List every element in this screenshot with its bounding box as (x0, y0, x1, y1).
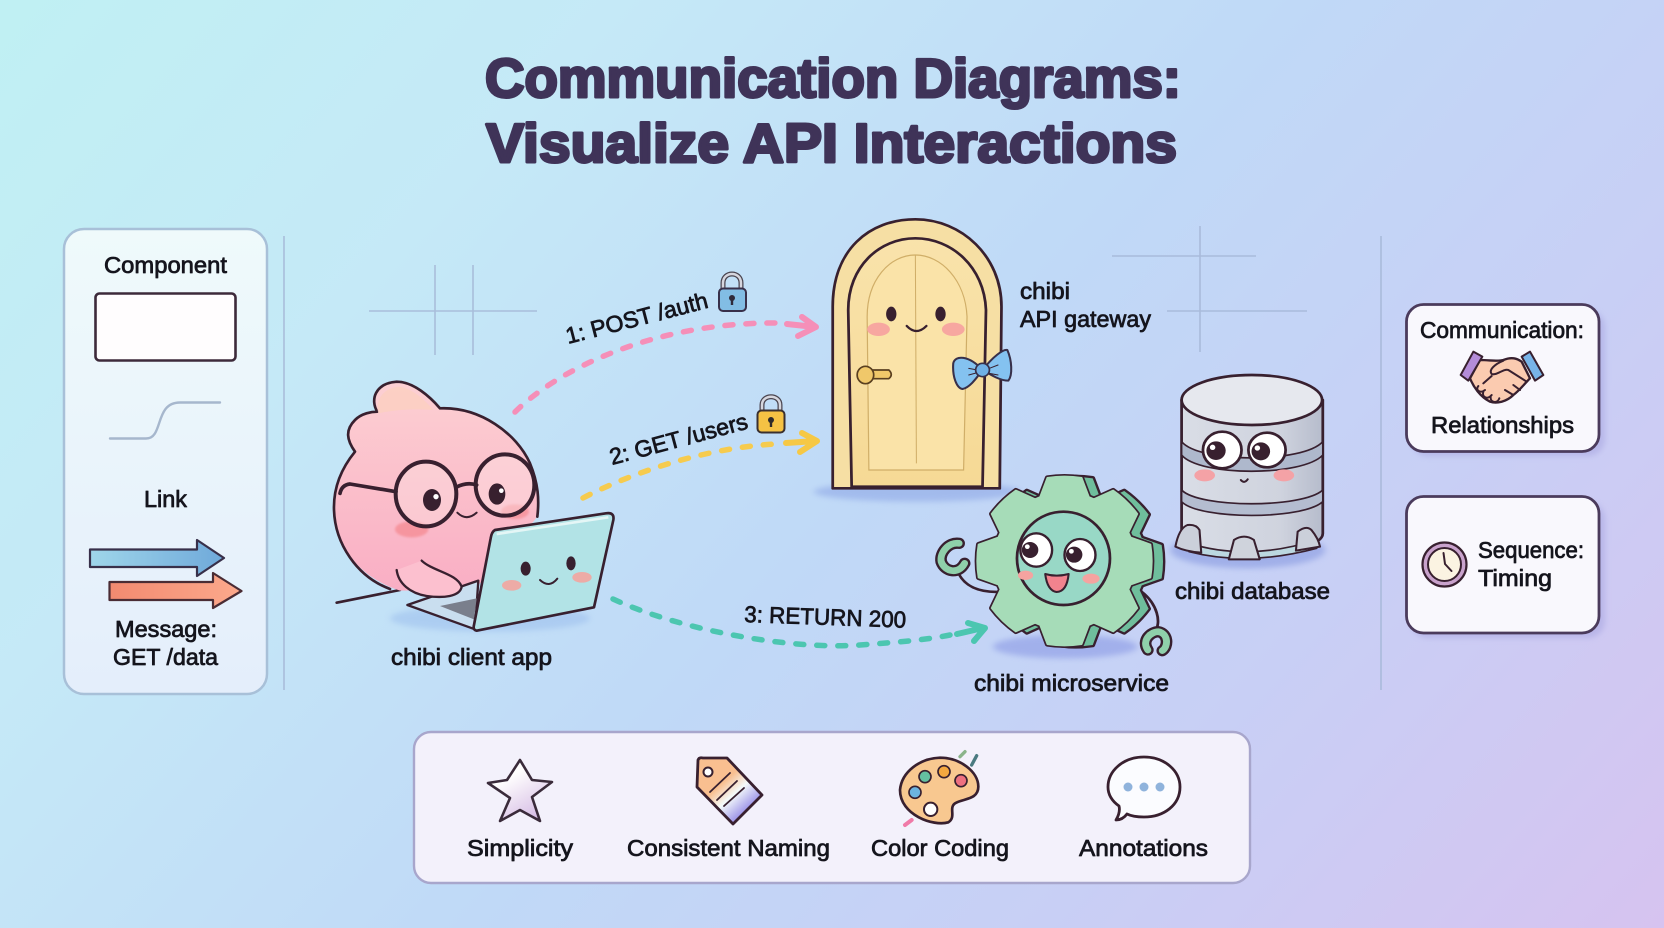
legend: link (110, 402, 220, 512)
arrow 2: GET /users: 2: GET /users (607, 408, 750, 470)
character: chibi client app (334, 382, 614, 632)
icon: handshake (1461, 352, 1543, 403)
item: consistent naming: Consistent Naming (627, 835, 830, 861)
title (485, 47, 1181, 174)
item: consistent naming (627, 758, 830, 861)
arrow 2: GET /users (583, 408, 817, 498)
panel: legend (64, 229, 267, 694)
character: chibi API gateway door (814, 219, 1020, 502)
panel: best practices (414, 732, 1250, 883)
card: communication relationships (1406, 304, 1605, 456)
label: chibi API gateway: chibi (1020, 278, 1070, 304)
icon: tag (697, 758, 762, 824)
label: chibi API gateway: API gateway (1020, 306, 1151, 332)
icon: yellow lock (758, 397, 784, 432)
item: annotations: Annotations (1079, 835, 1208, 861)
title: Visualize API Interactions (486, 112, 1177, 174)
icon: clock (1422, 542, 1466, 586)
arms and wrenches (941, 543, 1167, 651)
label: chibi client app: chibi client app (391, 644, 552, 670)
legend: component: Component (104, 252, 228, 278)
item: annotations (1079, 757, 1208, 861)
label: chibi API gateway (1020, 278, 1151, 332)
icon: blue lock (719, 274, 746, 311)
label: chibi database: chibi database (1175, 578, 1330, 604)
card: communication relationships: Communication: (1420, 317, 1584, 343)
legend: message: Message: (115, 616, 217, 642)
legend: message: GET /data (113, 644, 218, 670)
card: sequence timing (1406, 496, 1605, 638)
item: color coding (871, 752, 1009, 861)
icon: star (488, 760, 552, 821)
label: chibi microservice: chibi microservice (974, 670, 1169, 696)
icon: palette (900, 752, 978, 825)
legend: message (90, 540, 242, 670)
character: chibi microservice gear (941, 476, 1167, 658)
item: simplicity (467, 760, 574, 861)
card: sequence timing: Timing (1478, 565, 1552, 591)
guide lines (284, 226, 1381, 690)
arrow 1: POST /auth (515, 287, 816, 412)
arrow 3: RETURN 200: 3: RETURN 200 (744, 601, 907, 633)
legend: link: Link (144, 486, 187, 512)
card: sequence timing: Sequence: (1478, 537, 1584, 563)
card: communication relationships: Relationships (1431, 412, 1574, 438)
arrow 3: RETURN 200 (613, 599, 985, 646)
legend: component (96, 252, 236, 360)
icon: speech bubble (1108, 757, 1180, 820)
title: Communication Diagrams: (485, 47, 1181, 109)
character: chibi database (1170, 375, 1325, 568)
item: simplicity: Simplicity (467, 835, 574, 861)
item: color coding: Color Coding (871, 835, 1009, 861)
arrow 1: POST /auth: 1: POST /auth (563, 287, 711, 349)
